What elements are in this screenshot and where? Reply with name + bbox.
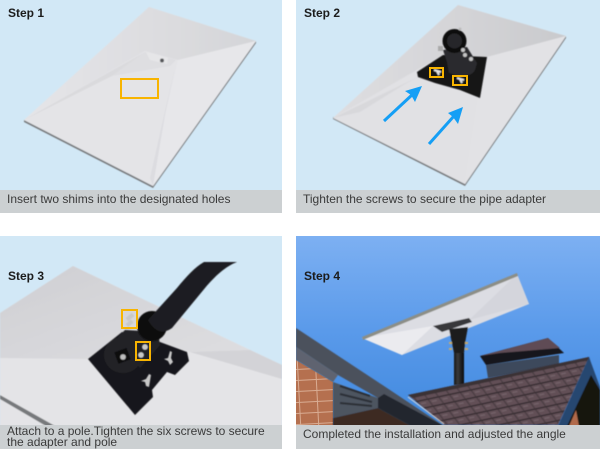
chimney: [480, 338, 564, 378]
caption: step 3: the adapter and pole: [7, 435, 117, 449]
highlight box: shim holes: [121, 79, 158, 98]
white mounting sheet, step 1: [24, 7, 256, 188]
caption: step 2: [296, 190, 600, 213]
white mounting sheet, step 2: [333, 5, 566, 186]
caption: step 2: Tighten the screws to secure the pipe adapter: [303, 192, 546, 206]
arrow: left blue: [384, 86, 422, 121]
panel: step 1: [0, 0, 282, 213]
grey roof edge and gutter: [296, 328, 444, 426]
caption: step 3: Attach to a pole.Tighten the six screws to secure: [7, 424, 265, 438]
panel: step 4: [296, 236, 600, 426]
caption: step 4: Completed the installation and adjusted the angle: [303, 427, 566, 441]
highlight boxes: pole screws: [122, 310, 150, 360]
panel: step 3: [0, 236, 282, 426]
white mounting sheet, close-up: [0, 266, 282, 426]
thumb screws: [126, 313, 173, 387]
black pipe adapter: [417, 28, 487, 98]
panel: step 2: [296, 0, 600, 213]
highlight boxes: screws: [430, 68, 467, 85]
satellite dish on mount: [362, 273, 529, 385]
caption: step 4: [296, 425, 600, 449]
caption: step 1: Insert two shims into the designated holes: [7, 192, 230, 206]
brick wall: [296, 360, 333, 426]
brown tiled roof: [408, 357, 600, 426]
heading: step 4: Step 4: [304, 269, 340, 283]
heading: step 3: Step 3: [8, 269, 44, 283]
black adapter plate: [88, 330, 189, 415]
black pole: [137, 262, 237, 341]
arrow: right blue: [429, 107, 463, 144]
caption: step 3: [0, 424, 282, 449]
heading: step 2: Step 2: [304, 6, 340, 20]
heading: step 1: Step 1: [8, 6, 44, 20]
caption: step 1: [0, 190, 282, 213]
